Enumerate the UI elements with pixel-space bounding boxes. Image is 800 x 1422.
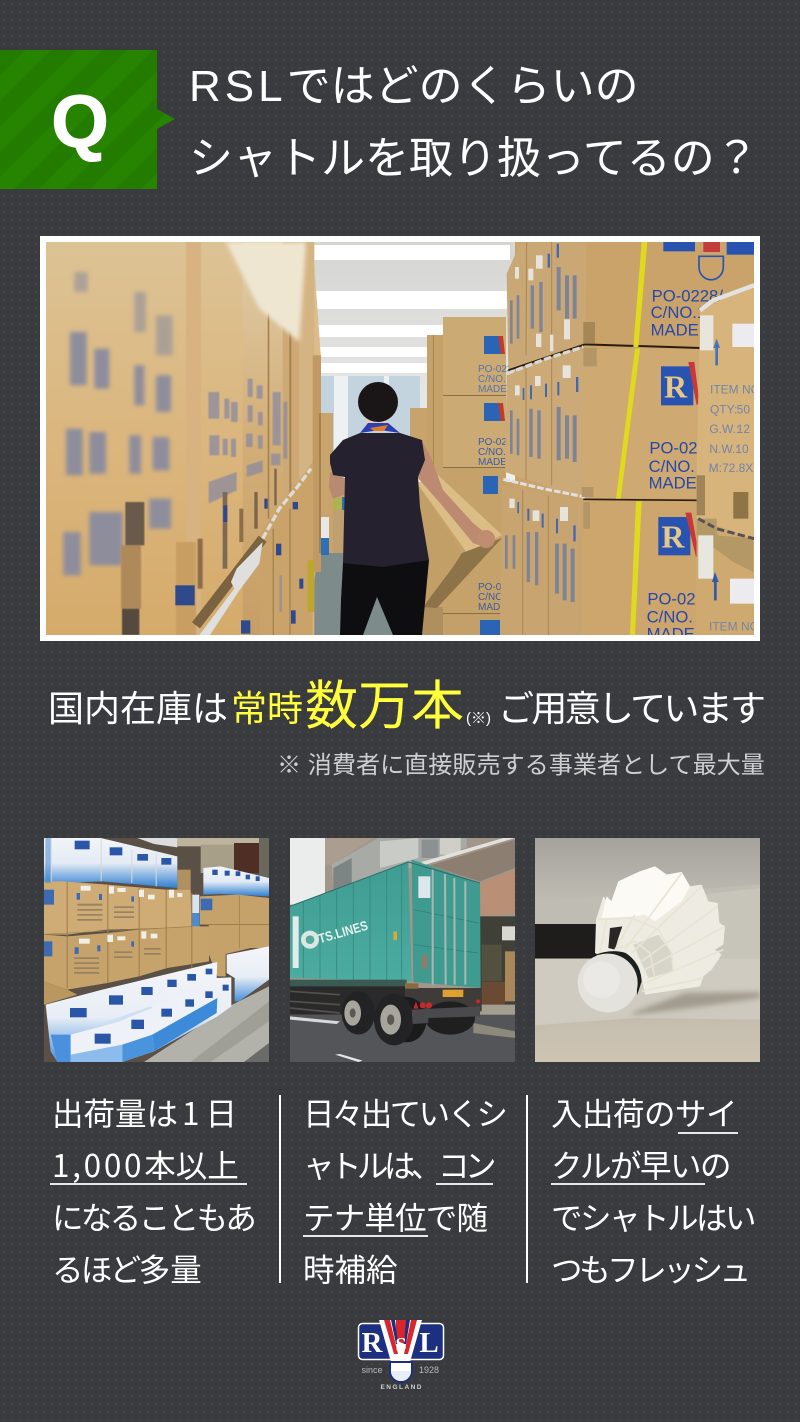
text column 3 (551, 1089, 754, 1291)
stock statement: (※) (466, 710, 491, 727)
title: シャトルを取り扱ってるの？ (189, 134, 759, 183)
photo: boxes stacked at warehouse entrance (44, 838, 269, 1062)
RSL logo (358, 1320, 444, 1391)
right stacks: G.W.: (709, 422, 739, 436)
right stacks: R (661, 518, 685, 554)
back corridor (300, 242, 515, 482)
text column 3: つもフレッシュ (551, 1245, 748, 1291)
RSL logo: ENGLAND (380, 1384, 422, 1391)
main warehouse photo: MADE I (478, 384, 512, 395)
main warehouse photo: MADE (478, 602, 507, 613)
text column 2: 時補給 (303, 1245, 398, 1291)
RSL logo: R (362, 1327, 384, 1359)
Q badge (0, 50, 175, 189)
underline column 1 (50, 1183, 247, 1185)
text column 1: になることもあ (52, 1193, 254, 1239)
right stacks: 10 (735, 442, 749, 456)
column divider 1 (279, 1095, 281, 1283)
text column 2: テナ単位で随 (303, 1193, 487, 1239)
main warehouse photo (40, 236, 760, 641)
stock statement: 数万本 (305, 677, 464, 736)
RSL logo: L (419, 1327, 439, 1359)
stock statement (48, 677, 764, 736)
right stacks: PO-02: (649, 439, 702, 458)
text column 3: 入出荷のサイ (551, 1089, 737, 1135)
right stacks: 50 (737, 403, 750, 417)
main warehouse photo: C/NO. (478, 447, 506, 458)
footnote: ※ 消費者に直接販売する事業者として最大量 (277, 752, 765, 779)
text column 1: 1,000本以上 (52, 1141, 239, 1187)
person carrying box (329, 382, 502, 635)
RSL logo: S (395, 1334, 407, 1356)
right stacks: 12 (737, 422, 750, 436)
main warehouse photo: MADE I (478, 457, 512, 468)
right stacks: R (664, 368, 688, 404)
middle stacks (427, 335, 444, 535)
right stacks: MADE (649, 474, 697, 493)
stock statement: 常時 (231, 688, 303, 729)
main warehouse photo: C/NO. (478, 374, 506, 385)
main warehouse photo: PO-023 (478, 364, 513, 375)
stock statement: ご用意しています (498, 688, 763, 729)
white boxes (227, 946, 269, 1001)
underline column 2 bottom (303, 1235, 428, 1237)
text column 2: ャトルは、コン (303, 1141, 492, 1187)
photo: shuttlecock (535, 838, 760, 1062)
right stacks: PO-0228/ (652, 286, 723, 305)
text column 2: 日々出ていくシ (303, 1089, 505, 1135)
underline column 3 bottom (551, 1183, 705, 1185)
right stacks: C/NO. (649, 457, 695, 476)
right stacks: C/NO.1 (651, 303, 706, 322)
text column 2 (303, 1089, 506, 1291)
right stacks: PO-02: (647, 590, 700, 609)
right stacks (500, 242, 775, 643)
underline column 2 top (436, 1183, 493, 1185)
main warehouse photo: PO-0236 (478, 437, 518, 448)
Q badge: Q (51, 80, 109, 163)
floor (144, 986, 269, 1062)
text column 1 (52, 1089, 254, 1291)
floor and small back boxes (305, 553, 395, 635)
title (189, 62, 759, 183)
stock statement: 国内在庫は (48, 688, 228, 729)
main warehouse photo: C/NO. (478, 592, 506, 603)
right stacks: C/NO. (647, 608, 693, 627)
column divider 2 (526, 1095, 528, 1283)
RSL logo: 1928 (419, 1365, 439, 1375)
far right box (697, 284, 754, 635)
underline column 3 top (678, 1132, 738, 1134)
photo: container truck (290, 838, 515, 1062)
right stacks: QTY: (710, 403, 737, 417)
main warehouse photo: PO-0 (478, 582, 502, 593)
text column 1: 出荷量は1日 (52, 1089, 237, 1135)
text column 3: クルが早いの (551, 1141, 730, 1187)
RSL logo: since (361, 1365, 383, 1375)
right stacks: MADE (651, 320, 699, 339)
box print and labels (509, 255, 571, 521)
text column 1: るほど多量 (52, 1245, 202, 1291)
left wall of boxes (46, 242, 321, 635)
text column 3: でシャトルはい (551, 1193, 754, 1239)
title: RSLではどのくらいの (189, 62, 639, 111)
right stacks: N.W.: (709, 442, 739, 456)
photo: container truck: TS.LINES (317, 918, 370, 946)
